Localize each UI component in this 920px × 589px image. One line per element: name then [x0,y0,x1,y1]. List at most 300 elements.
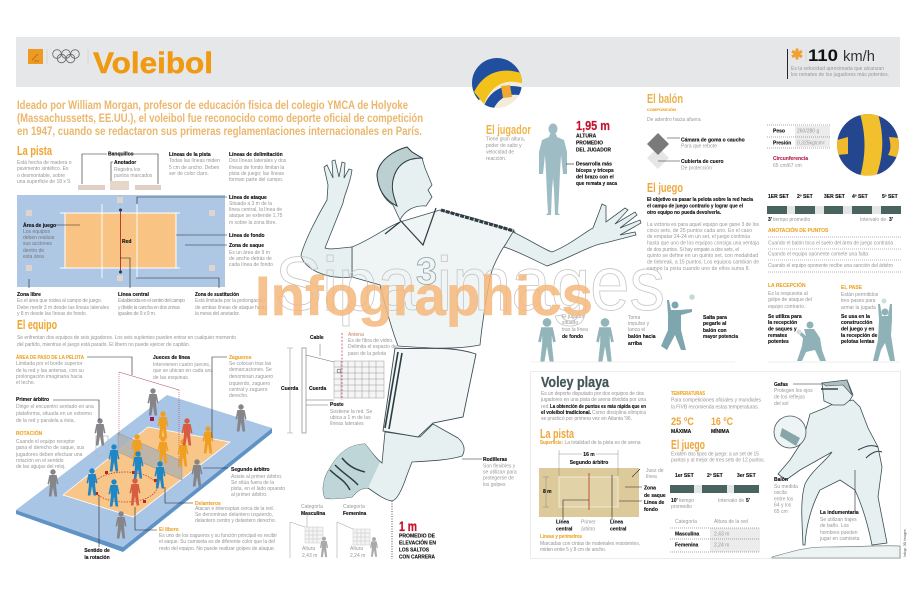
label: lineas de delimitacion: líneas de fondo limitan la [229,165,285,171]
text: objective: el campo de juego contrario y lograr que el [647,204,744,210]
text: superficie: La totalidad de la pista es de arena [564,440,641,446]
beach sets timeline: 5' [746,498,750,504]
callout: 1 m jump: LOS SALTOS [399,548,430,554]
label: balon: 64 y los [774,502,792,508]
beach court diagram: fondo [644,507,658,513]
callout: 1,95 m: ALTURA [576,134,597,140]
panel: el balon: De adentro hacia afuera [647,117,701,123]
beach sets timeline: tiempo [679,498,694,504]
label: rotacion: ROTACIÓN [16,429,43,437]
net [118,433,182,480]
beach sets timeline: 3er SET [737,473,756,479]
label: area de paso: el techo. [16,380,35,386]
label: lineas de delimitacion: Líneas de delimitación [229,152,283,158]
heading: la pista playa: La pista [540,427,575,441]
panel: el equipo [15,318,285,561]
text: serve step 2: balón hacia [628,334,656,340]
text: serve step 3: pegarle al [703,321,727,327]
panel: la recepcion: la recepción [768,320,797,326]
label: zona libre: Debe medir 3 m desde las líneas laterales [17,305,110,311]
label: el libero [159,527,277,552]
text: pista description [17,160,72,185]
label: rodilleras: los golpes [483,482,506,488]
label: linea central: iguales de 9 x 9 m. [118,311,156,317]
label: segundo arbitro [231,467,285,498]
panel: el pase: la recepción de [841,333,878,339]
beach court diagram: de saque [644,493,666,499]
panel: el pase: construcción [841,320,872,326]
text: serve step 2 [628,315,656,347]
net height: femenina: Altura [350,546,363,552]
label: indumentaria: La indumentaria [820,510,859,516]
list: anotacion de puntos: Cuando el equipo oponente comete una falta [768,252,868,258]
panel: el balon: COMPOSICIÓN [647,107,676,112]
text: serve step 2: lanza el [628,327,645,333]
label: antena [348,332,397,357]
panel: la recepcion: equipo contrario. [768,304,805,310]
label: rotacion [15,429,85,470]
text: rules: quinto se define en un quinto set, con modalidad [647,253,758,259]
text: serve step 1: situado [562,320,578,326]
label: linea central: y divide la cancha en dos zonas [118,305,180,311]
text: rules: de tiebreak, a 15 puntos. Los equipos cambian de [647,260,759,266]
text: superficie: Superficie: [540,440,563,446]
label: linea de ataque: Situada a 3 m de la [229,201,272,207]
text: lineas y perimetros: Líneas y perímetros [540,534,582,540]
label: rotacion: Cuando el equipo receptor [16,439,75,445]
right arm [504,204,641,266]
label: area de paso [16,354,84,386]
net height: femenina: Femenina [343,511,367,517]
table: net height: Masculina [675,532,699,538]
label: area de paso: prolongación imaginaria hacia [16,374,83,380]
panel: el balon [647,92,745,172]
table: ball specs: Circunferencia [773,156,808,162]
speed callout: 110 km/h: km/h [843,48,875,65]
label: balon: oscila [774,490,787,496]
stat: maxima [671,416,694,435]
label: area de paso: ÁREA DE PASO DE LA PELOTA [16,354,84,361]
beach court diagram: 8 m [543,489,552,495]
net side diagram [281,332,397,433]
text: tipos de juego: Existen dos tipos de juego: a un set de 15 [671,452,759,458]
panel: la recepcion: Es la respuesta al [768,291,808,297]
label: linea de ataque: Línea de ataque [229,195,267,201]
label: poste: ubica a 1 m de las [330,415,371,421]
panel: la recepcion: Se utiliza para [768,314,802,320]
panel: el balon: Cubierta de cuero [681,159,724,165]
heading: el juego: El juego [647,181,683,195]
label: indumentaria: jugar en camiseta [819,536,860,542]
head [377,147,432,220]
heading: el juego playa: El juego [671,438,705,452]
icon: sport pictogram [28,49,43,64]
icon: volleyball [837,114,900,180]
label: lineas de la pista: 5 cm de ancho. Deben [169,165,220,171]
callout: 1 m jump: PROMEDIO DE [399,534,436,540]
sets timeline: tiempo promedio [773,217,810,223]
table: net height: Altura de la red [714,519,748,525]
sets timeline [767,194,901,223]
title: Voleibol [93,47,213,80]
beach player illustration [772,380,900,558]
net mesh [334,361,384,398]
panel: el pase: Se usa en la [841,314,870,320]
shirt number: 3 [416,251,437,293]
text: serve step 3: mayor potencia [703,334,738,340]
stat: minima: MÍNIMA [711,427,730,435]
intro paragraph: Ideado por William Morgan, profesor de educación física del colegio YMCA de Holyoke [17,100,408,112]
label: linea central: Establecida en el centro del campo [118,298,185,304]
figure: reception pose [796,322,826,361]
label: balon: Balón [774,477,788,483]
label: rotacion: de las agujas del reloj. [16,464,66,470]
label: primer arbitro: de la red y paralela a ésta. [16,418,75,424]
text: jugador description: reacción. [486,156,506,162]
label: delanteros: Se denominan delantero izquierdo, [195,512,273,518]
beach court diagram: Zona [644,486,656,492]
callout: 1 m jump [392,501,436,560]
callout: 1,95 m: PROMEDIO [576,140,603,146]
panel: la pista [17,144,287,317]
table: ball specs [767,125,830,169]
label: antena: paso de la pelota [348,351,386,357]
layers diagram [647,133,669,169]
label: zona libre: Zona libre [17,292,41,298]
label: el libero: resto del equipo. No puede realizar golpes de ataque. [159,546,275,552]
label: balon: 65 cm [774,509,788,515]
net height: masculina: Altura [302,546,315,552]
label: gafas: Protegen los ojos [774,388,813,394]
label: balon: entre los [774,496,794,502]
callout: biceps: Desarrolla más [576,162,612,168]
text: jugador description: Tiene gran altura, [486,136,525,142]
table: ball specs: 260/280 g [797,128,819,134]
label: segundo arbitro: al primer árbitro. [231,492,267,498]
text: jugador description [486,136,525,162]
panel: el balon: Para que rebote [681,144,717,150]
callout: biceps [566,162,617,187]
label: area de paso: de la red y las antenas, con su [16,368,84,374]
text: voley playa description: el voleibol tradicional. [541,410,592,416]
intro paragraph: (Massachussetts, EE.UU.), el voleibol fue reconocido como deporte oficial de competición [17,113,423,125]
text: rules: de empatar 24-24 en un set, el juego continúa [647,234,750,240]
label: area de juego: Los equipos [23,229,50,235]
net side diagram: Cable [310,335,324,341]
table: ball specs: Presión [773,140,791,146]
label: jueces de linea: Intervienen cuatro jueces, [153,362,210,368]
label: zona de sustitucion: de ambas líneas de ataque hasta [195,305,267,311]
text: equipo description: Se enfrentan dos equipos de seis jugadores. Los seis suplentes pueden entrar en cualquier momento [17,335,236,341]
label: linea de ataque [229,195,283,226]
label: zona libre: y 8 m desde las líneas de fondo. [17,311,87,317]
label: indumentaria: Se utilizan trajes [820,517,857,523]
text: voley playa description: se practicó por primera vez en Atlanta '96. [541,416,632,422]
label: lineas de delimitacion: forman parte del campo. [229,177,283,183]
panel: el jugador [486,118,617,215]
text: voley playa description: Como disciplina olímpica [592,410,646,416]
label: segundo arbitro: Asiste al primer árbitro. [231,474,282,480]
label: rodilleras: se utilizan para [483,470,517,476]
beach court diagram: árbitro [581,526,595,532]
court plan diagram [17,195,225,287]
table: ball specs: Peso [773,128,785,134]
beach court diagram: Línea [556,520,569,526]
bench diagram: Anotador [114,160,136,166]
label: area de juego: dentro de [23,248,44,254]
label: antena: Es de fibra de vidrio. [348,338,394,344]
heading: la pista: La pista [17,144,53,158]
panel: el pase [768,285,900,362]
text: jugador description: poder de salto y [486,143,522,149]
callout: 1,95 m [576,118,611,154]
text: objective: El objetivo es pasar la pelota sobre la red hacia [647,197,753,203]
text: serve step 2: Toma [628,315,640,321]
text: pista description: una superficie de 18 x 9. [17,179,71,185]
text: rules: La victoria es para aquel equipo que gane 3 de los [647,222,760,228]
watermark: outline text: Sipa images [275,242,665,327]
bench diagram: puntos marcados [114,173,153,179]
panel: la recepcion [768,281,826,361]
beach court diagram: central [556,526,573,532]
label: rotacion: jugadores deben efectuar una [15,452,83,458]
label: jueces de linea: que se ubican en cada una [153,368,213,374]
label: delanteros: Delanteros [195,501,221,507]
callout: 1 m jump: CON CARRERA [399,554,435,560]
label: primer arbitro: Primer árbitro [16,397,49,403]
panel: la recepcion: de saques y [768,326,797,332]
panel: el balon: Cámara de goma o caucho [681,138,745,144]
text: objective [647,197,753,216]
sets timeline: 3' [889,217,893,223]
net side diagram: Cuerda [281,386,298,392]
label: lineas de la pista: ser de color claro. [169,171,209,177]
label: poste: Poste [330,402,344,408]
text: voley playa description [540,391,646,422]
beach sets timeline [670,473,759,510]
left arm [301,160,352,277]
text: serve step 3: balón con [703,328,727,334]
label: lineas de la pista: Líneas de la pista [169,152,211,158]
panel: el balon: De protección [681,166,712,172]
net height: femenina [337,504,378,559]
label: lineas de la pista: Todas las líneas miden [169,158,220,164]
label: gafas: de los reflejos [774,394,805,400]
label: zona libre: Es el área que rodea al campo de juego. [17,298,102,304]
players [48,388,246,538]
label: primer arbitro: plataforma, situada en un extremo [16,411,92,417]
label: rotacion: rotación en el sentido [16,458,64,464]
net height: masculina: 2,43 m [302,553,317,559]
text: tipos de juego: puntos y al mejor de tres sets de 12 puntos. [671,458,765,464]
speed callout: 110 km/h [787,46,889,79]
text: equipo description [17,335,236,348]
panel: el juego [647,181,760,272]
sets timeline: 2º SET [797,194,813,200]
label: segundo arbitro: pista, en el lado opuesto [231,486,285,492]
label: linea central: Línea central [118,292,149,298]
label: el libero: el saque. Su camiseta es de diferente color que la del [159,539,275,545]
panel: la recepcion: remates [768,333,787,339]
label: zona de saque: Es un área de 9 m [229,250,270,256]
callout: 1 m jump: ELEVACIÓN EN [399,538,436,546]
beach court diagram: Línea de [644,500,665,506]
label: zagueros: Zagueros [229,355,252,361]
rotation path [93,472,157,502]
label: zona de sustitucion: Está limitada por la prolongación [195,298,265,304]
text: voley playa description: red. [541,404,550,410]
text: pista description: pavimento sintético. Es [17,166,69,172]
label: segundo arbitro: Segundo árbitro [231,467,270,473]
label: gafas [774,382,813,407]
table: net height: 2,24 m [714,542,729,548]
label: lineas de delimitacion [229,152,287,183]
text: pista description: o desmontable, sobre [17,173,65,179]
text: objective: otro equipo no pueda devolverla. [647,210,722,216]
beach court diagram [539,450,666,532]
net height: femenina: Categoría [343,504,365,510]
label: linea de fondo: Línea de fondo [229,233,265,239]
header band [16,37,900,87]
label: delanteros [195,501,276,524]
text: voley playa description: Es un deporte disputado por dos equipos de dos [541,391,644,397]
panel: voley playa [530,372,907,558]
table: net height: 2,43 m [714,532,729,538]
speed callout: 110 km/h: Es la velocidad aproximada que alcanzan [791,66,884,72]
label: jueces de linea: de las esquinas. [153,375,189,381]
heading: el balon: El balón [647,92,683,106]
text: rules: campo la pista cuando uno de ellos suma 8. [647,266,750,272]
label: poste [330,402,372,427]
serve sequence [530,294,738,362]
text: rules [647,222,760,272]
label: zagueros: derecho. [229,393,248,399]
beach court diagram: Línea [610,520,623,526]
leader lines [53,357,228,547]
label: area de juego: sus acciones [23,241,52,247]
text: serve step 1 [562,314,588,340]
text: temperaturas: la FIVB recomienda estas temperaturas. [671,404,759,410]
speed callout: 110 km/h: los remates de los jugadores más potentes. [791,72,889,78]
text: lineas y perimetros [540,534,640,553]
label: sentido de la rotacion [84,548,110,561]
label: balon: Su medida [774,484,798,490]
sets timeline: 4º SET [852,194,868,200]
label: zona libre [17,292,110,317]
label: lineas de delimitacion: pista de juego; las líneas [229,171,285,177]
watermark: infographics: Infographics [255,264,593,327]
speed callout: 110 km/h: 110 [808,46,838,65]
credit: Infogr. 3D Images [903,529,907,557]
isometric court [16,372,272,552]
list: anotacion de puntos [768,226,902,272]
net height: masculina: Categoría [301,504,323,510]
panel: la recepcion: golpe de ataque del [768,297,812,303]
leader lines [29,197,227,288]
label: lineas de delimitacion: Dos líneas laterales y dos [229,158,287,164]
text: serve step 3: Salta para [703,315,727,321]
label: zona de sustitucion [195,292,267,317]
label: delanteros: Atacan e interceptan cerca de la red. [195,506,274,512]
intro paragraph: en 1947, cuando se redactaron sus primeras reglamentaciones internacionales en París. [17,126,422,138]
beach court diagram: 16 m [583,452,595,458]
beach sets timeline: 10' [671,498,678,504]
sets timeline: 1ER SET [768,194,789,200]
label: rodilleras: Son flexibles y [483,464,516,470]
callout: 1,95 m: 1,95 m [576,118,610,133]
label: segundo arbitro: Se sitúa fuera de la [231,480,274,486]
icon: asterisk [792,48,802,60]
label: poste: Sostiene la red. Se [330,409,372,415]
label: linea de ataque: m sobre la zona libre. [229,220,277,226]
text: jugador description: velocidad de [486,150,514,156]
heading: el equipo: El equipo [17,318,57,332]
label: el libero: El líbero [159,527,179,533]
net side diagram: Cuerda [309,386,326,392]
label: zona de sustitucion: la mesa del anotador. [195,311,240,317]
court plan diagram: Red [122,239,131,245]
panel: la recepcion: LA RECEPCIÓN [768,281,806,289]
text: voley playa description: jugadores en una pista de arena dividida por una [540,397,646,403]
table: net height: Femenina [675,542,699,548]
figure: serve step 1 [538,318,556,362]
text: tipos de juego [671,452,765,464]
label: jueces de linea: Jueces de línea [153,355,190,361]
panel: el pase: tres pases para [841,298,876,304]
beach court diagram: central [610,526,627,532]
text: serve step 2: impulso y [628,321,650,327]
label: sentido de la rotacion: la rotación [84,555,110,561]
figure: serve step 2 [596,318,614,362]
text: temperaturas [671,391,762,410]
label: antena: Delimita el espacio de [348,344,397,350]
label: zona de saque: cada línea de fondo [229,262,273,268]
heading: el jugador: El jugador [486,123,531,137]
table: net height [670,519,760,552]
label: rodilleras [462,457,517,488]
net height: masculina: Masculina [301,511,325,517]
label: indumentaria [819,510,860,542]
label: linea de ataque: ataque se extiende 1,75 [229,213,283,219]
label: delanteros: delantero centro y delantero derecho. [195,518,276,524]
label: sentido de la rotacion: Sentido de [84,548,110,554]
net height: masculina [290,504,328,559]
text: rules: cinco sets, de 25 puntos cada uno. En el caso [647,228,752,234]
sets timeline: Intervalo de [860,217,886,223]
beach sets timeline: 2º SET [707,473,723,479]
callout: 1,95 m: DEL JUGADOR [576,148,611,154]
table: ball specs: 65 cm/67 cm [773,163,802,169]
label: primer arbitro [16,397,94,424]
stat: maxima: 25 ºC [671,416,694,428]
callout: biceps: que remata y saca [576,181,617,187]
text: serve step 3 [703,315,738,340]
sets timeline: 5º SET [882,194,898,200]
label: rotacion: gana el derecho de saque, sus [16,445,85,451]
list: anotacion de puntos: ANOTACIÓN DE PUNTOS [768,226,829,234]
panel: la recepcion: potentes [768,339,789,345]
anatomical figure [539,124,567,215]
list: anotacion de puntos: Cuando el equipo oponente recibe una sanción del árbitro [768,263,893,269]
label: zagueros: central y zaguero [229,387,268,393]
icon: olympic rings [53,50,79,63]
label: zona de sustitucion: Zona de sustitución [195,292,239,298]
label: linea central [118,292,185,317]
label: antena: Antena [348,332,364,338]
label: poste: líneas laterales [330,421,364,427]
label: area de juego [23,222,56,260]
label: area de juego: Área de juego [23,222,56,229]
